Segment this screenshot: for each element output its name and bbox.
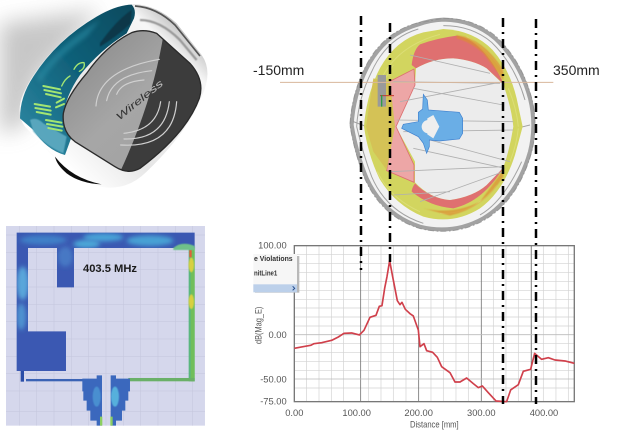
dash-dot boundary lines	[361, 16, 536, 404]
device photo: wireless implant	[0, 4, 213, 188]
body dark rim	[135, 6, 200, 56]
axis labels: 400.00	[530, 408, 558, 418]
yellow fat layer	[364, 29, 523, 219]
axis labels: 0.00	[285, 408, 303, 418]
brain cavity	[396, 58, 513, 200]
axis labels: 100.00	[258, 240, 287, 250]
red tissue band	[412, 36, 504, 208]
dark lower edge	[55, 157, 102, 184]
device shadow	[0, 10, 100, 133]
antenna trace	[17, 233, 195, 426]
distance chart	[253, 240, 574, 429]
charging pad	[64, 31, 200, 171]
plot frame	[294, 246, 574, 402]
axis labels: dB(Mag_E)	[253, 307, 263, 344]
right arm	[189, 248, 195, 381]
antenna simulation panel	[6, 226, 205, 426]
pad dark reflection	[122, 40, 200, 171]
axis labels: -50.00	[260, 374, 287, 384]
panel background	[6, 226, 205, 426]
head model cross-section	[280, 18, 553, 231]
green coils	[35, 63, 84, 131]
context menu overlay: nitLine1	[254, 268, 277, 277]
frontal red wedges	[387, 69, 415, 182]
device body	[20, 4, 207, 188]
horizontal reference line	[280, 81, 553, 84]
teal transparent shell	[20, 5, 135, 155]
left distance label: -150mm	[253, 62, 304, 78]
axis labels: Distance [mm]	[410, 419, 459, 429]
right distance label: 350mm	[553, 62, 600, 78]
axis labels: 300.00	[467, 408, 496, 418]
axis labels	[253, 240, 558, 429]
mesh lines	[390, 55, 513, 202]
axis labels: -75.00	[260, 396, 287, 406]
wireless label: Wireless	[114, 78, 166, 123]
implant grey block	[378, 75, 386, 107]
axis labels: 0.00	[269, 330, 287, 340]
frequency label: 403.5 MHz	[83, 263, 137, 275]
context menu overlay	[253, 254, 299, 293]
ear yellow patch	[366, 78, 395, 170]
axis labels: 200.00	[404, 408, 433, 418]
context menu overlay: e Violations	[254, 254, 293, 263]
wireless signal arcs	[96, 59, 177, 145]
blue spine	[402, 94, 463, 153]
bottom arm	[128, 378, 195, 381]
axis labels: 100.00	[342, 408, 371, 418]
outer skin mesh	[352, 20, 533, 229]
feed tapers	[82, 375, 102, 426]
plot grid	[294, 246, 574, 402]
red field curve	[294, 261, 574, 402]
